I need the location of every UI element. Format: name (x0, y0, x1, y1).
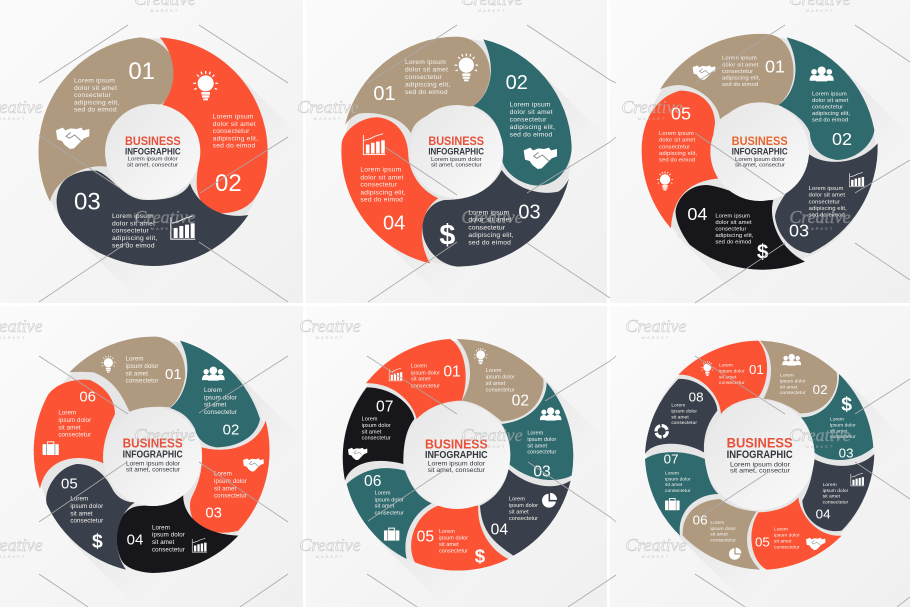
segment 03: Lorem (214, 471, 232, 478)
segment 05: $ (92, 531, 103, 552)
segment 03: dolor sit amet (468, 217, 512, 224)
segment 03: sed do eimod (112, 242, 155, 249)
segment 07 (645, 452, 718, 536)
Creative Market watermarks: Creative (625, 535, 687, 555)
segment 01: sit amet (719, 374, 737, 380)
segment 01 (366, 339, 466, 419)
segment 01: ipsum dolor (126, 363, 159, 370)
Creative Market watermarks: Creative (621, 97, 683, 117)
panel: six step cycle (34, 337, 302, 606)
Creative Market watermarks: MARKET (314, 116, 342, 121)
segment 05: consectetur (659, 144, 690, 150)
segment 04: sed do eimod (715, 240, 752, 246)
segment 01: Lorem (126, 356, 144, 363)
center label: sit amet, consectur (431, 163, 482, 169)
segment 03: Lorem ipsum (809, 186, 843, 192)
segment 01 (38, 37, 175, 202)
segment 04: sit amet (152, 539, 175, 546)
segment 02: Lorem (780, 373, 794, 379)
segment 04: 04 (383, 212, 405, 234)
segment 04: $ (757, 240, 769, 263)
segment 02: Lorem ipsum (510, 101, 551, 108)
center label: BUSINESS (732, 134, 788, 148)
segment 03: 03 (839, 445, 853, 460)
segment 05 (411, 506, 508, 571)
center label (705, 400, 815, 510)
segment 07: sit amet (362, 429, 382, 435)
segment 02: consectetur (780, 390, 806, 396)
segment 03: sed do eimod (809, 212, 845, 218)
segment 01: sit amet (126, 370, 148, 377)
segment 05: sit amet (774, 538, 792, 544)
segment 02: 02 (506, 72, 528, 94)
segment 01: consectetur (405, 74, 443, 81)
segment 02: 02 (512, 393, 529, 410)
segment 02: sed do eimod (812, 117, 848, 123)
center label: INFOGRAPHIC (727, 449, 793, 461)
Creative Market watermarks: Creative (299, 316, 361, 336)
segment 01: sed do eimod (74, 106, 117, 113)
center label: Lorem ipsum dolor (735, 157, 785, 163)
segment 03: consectetur (112, 228, 150, 235)
segment 04: adipiscing elit, (360, 189, 406, 196)
segment 02 (170, 341, 260, 447)
segment 01: Lorem (411, 364, 427, 370)
segment 02: ipsum dolor (780, 378, 806, 384)
segment 05: sit amet (439, 542, 459, 548)
segment 05: Lorem (439, 529, 455, 535)
Creative Market watermarks: Creative (297, 97, 359, 117)
segment 02: ipsum dolor (486, 375, 515, 381)
panel: three step cycle (38, 37, 301, 300)
segment 02: consectetur (510, 116, 547, 123)
segment 01: adipiscing elit, (74, 99, 120, 106)
Creative Market watermarks: MARKET (151, 8, 179, 13)
segment 01: consectetur (74, 92, 112, 99)
segment 04: consectetur (509, 516, 538, 522)
Creative Market watermarks: MARKET (316, 554, 344, 559)
segment 04: sit amet (509, 509, 529, 515)
segment 07: consectetur (665, 488, 691, 494)
segment 06: Lorem (710, 520, 724, 526)
segment 01: adipiscing elit, (405, 82, 451, 89)
segment 03: consectetur (809, 199, 840, 205)
segment 06: sit amet (375, 504, 395, 510)
segment 05: ipsum dolor (70, 503, 103, 510)
segment 04: sed do eimod (360, 197, 403, 204)
segment 05: sed do eimod (659, 157, 695, 163)
segment 02: sit amet (486, 381, 506, 387)
segment 02: consectetur (213, 128, 250, 135)
segment 01: sed do eimod (722, 82, 758, 88)
segment 01 (678, 341, 767, 414)
Creative Market watermarks: Creative (789, 207, 851, 227)
segment 02: sit amet (204, 402, 227, 409)
segment 03: sit amet (830, 428, 848, 434)
Creative Market watermarks: MARKET (478, 8, 506, 13)
segment 02: dolor sit amet (213, 121, 256, 128)
segment 07: sit amet (665, 482, 683, 488)
segment 07: ipsum dolor (362, 423, 391, 429)
center label: BUSINESS (123, 436, 183, 450)
segment 03 (801, 374, 873, 460)
segment 05: adipiscing elit, (659, 151, 697, 157)
segment 05: 05 (671, 103, 691, 123)
Creative Market watermarks: Creative (461, 207, 523, 227)
segment 01: dolor sit amet (74, 85, 117, 92)
segment 01 (69, 337, 185, 412)
segment 04: Lorem (152, 524, 170, 531)
segment 02: Lorem (204, 387, 222, 394)
segment 03: adipiscing elit, (112, 235, 158, 242)
Creative Market watermarks: MARKET (806, 444, 834, 449)
Creative Market watermarks: MARKET (806, 8, 834, 13)
segment 05: Lorem (774, 527, 788, 533)
segment 01: Lorem ipsum (405, 59, 446, 66)
segment 07: Lorem (665, 470, 679, 476)
segment 03: 03 (74, 188, 101, 215)
Creative Market watermarks: Creative (299, 535, 361, 555)
segment 03: $ (439, 219, 455, 251)
segment 06: ipsum dolor (375, 497, 404, 503)
segment 04 (676, 185, 805, 270)
segment 07 (343, 387, 414, 481)
segment 08 (645, 379, 717, 454)
segment 04: sit amet (823, 494, 841, 500)
panel: seven step cycle (343, 339, 606, 604)
segment 03: adipiscing elit, (809, 206, 847, 212)
Creative Market watermarks: Creative (134, 425, 196, 445)
segment 07: ipsum dolor (665, 476, 691, 482)
panel: eight step cycle (645, 341, 907, 603)
segment 06: 06 (79, 389, 96, 406)
segment 01: 01 (128, 58, 155, 85)
segment 01: 01 (373, 83, 396, 105)
segment 08: 08 (689, 389, 703, 404)
segment 06: Lorem (58, 410, 76, 417)
segment 03 (190, 421, 270, 533)
segment 05 (642, 91, 720, 228)
center label: INFOGRAPHIC (425, 450, 488, 461)
segment 04: 04 (816, 506, 831, 521)
Creative Market watermarks: MARKET (151, 226, 179, 231)
segment 03: ipsum dolor (527, 437, 557, 443)
segment 02: consectetur (812, 104, 843, 110)
segment 01: ipsum dolor (719, 368, 745, 374)
center label: sit amet, consectur (126, 467, 180, 473)
segment 06 (34, 380, 115, 489)
segment 03: Lorem ipsum (112, 213, 153, 220)
segment 02 (160, 37, 268, 213)
segment 03: consectetur (830, 434, 856, 440)
segment 04: Lorem ipsum (715, 213, 750, 219)
center label: sit amet, consectur (730, 468, 791, 475)
segment 04: ipsum dolor (152, 532, 185, 539)
segment 05: consectetur (439, 549, 468, 555)
segment 05: dolor sit amet (659, 138, 696, 144)
segment 02: 02 (223, 422, 239, 439)
segment 02: 02 (832, 129, 852, 149)
center label: sit amet, consectur (428, 467, 486, 474)
center label: INFOGRAPHIC (428, 146, 484, 156)
segment 04: Lorem (823, 482, 837, 488)
segment 02: adipiscing elit, (510, 124, 555, 131)
center label (410, 105, 503, 198)
segment 02: dolor sit amet (510, 109, 553, 116)
segment 03: ipsum dolor (214, 478, 247, 485)
segment 03: adipiscing elit, (468, 232, 514, 239)
segment 06: 06 (364, 473, 382, 490)
segment 03 (502, 382, 573, 480)
segment 08: Lorem (671, 402, 685, 408)
segment 02 (778, 37, 874, 160)
segment 06: Lorem (375, 491, 391, 497)
segment 05 (751, 497, 842, 570)
segment 04: consectetur (360, 182, 398, 189)
segment 03: Lorem ipsum (468, 209, 510, 216)
Creative Market watermarks: MARKET (638, 116, 666, 121)
segment 06: consectetur (375, 510, 404, 516)
segment 05: Lorem ipsum (659, 131, 694, 137)
segment 02: sed do eimod (213, 142, 255, 149)
segment 05 (46, 464, 135, 570)
center label: BUSINESS (727, 434, 793, 450)
segment 07: 07 (664, 452, 678, 467)
segment 02: ipsum dolor (204, 394, 237, 401)
segment 03: $ (841, 395, 852, 416)
segment 05: $ (475, 545, 486, 566)
segment 02: adipiscing elit, (812, 111, 850, 117)
center label (105, 104, 200, 199)
center label: Lorem ipsum dolor (128, 157, 178, 163)
segment 08: ipsum dolor (671, 408, 697, 414)
segment 03: consectetur (527, 450, 557, 456)
segment 04: 04 (491, 522, 508, 539)
segment 04: dolor sit amet (360, 174, 404, 181)
segment 03: sed do eimod (468, 239, 511, 246)
segment 01: Lorem (719, 363, 733, 369)
center label: Lorem ipsum dolor (730, 462, 791, 469)
segment 01: sit amet (411, 377, 431, 383)
segment 04 (117, 494, 238, 573)
segment 03 (57, 171, 248, 266)
segment 03: sit amet (527, 443, 547, 449)
segment 05: 05 (61, 475, 78, 492)
segment 06: consectetur (710, 538, 736, 544)
center label (103, 407, 202, 506)
segment 04: consectetur (152, 546, 185, 553)
segment 01: 01 (165, 366, 182, 383)
segment 02: Lorem ipsum (213, 114, 254, 121)
segment 07: consectetur (362, 436, 391, 442)
segment 01: dolor sit amet (722, 62, 759, 68)
segment 03: sit amet (214, 485, 237, 492)
segment 01: Lorem ipsum (722, 56, 757, 62)
segment 03: dolor sit amet (809, 193, 845, 199)
segment 04: consectetur (715, 227, 747, 233)
segment 02: Lorem ipsum (812, 91, 847, 97)
segment 02: 02 (813, 382, 827, 397)
segment 03: 03 (533, 463, 551, 480)
segment 05: sit amet (70, 510, 93, 517)
Creative Market watermarks: MARKET (478, 444, 506, 449)
segment 02: 02 (215, 170, 242, 197)
center label: BUSINESS (428, 134, 484, 148)
segment 04: consectetur (823, 500, 849, 506)
segment 05: 05 (755, 534, 770, 549)
segment 05: ipsum dolor (774, 533, 800, 539)
segment 04 (802, 454, 874, 531)
segment 01: adipiscing elit, (722, 76, 760, 82)
segment 04 (480, 469, 571, 556)
center label (710, 102, 809, 201)
segment 01: sed do eimod (405, 89, 448, 96)
segment 01: consectetur (126, 378, 159, 385)
segment 02: consectetur (486, 387, 515, 393)
center label: INFOGRAPHIC (732, 146, 788, 156)
segment 02: sed do eimod (510, 131, 552, 138)
center label: INFOGRAPHIC (123, 449, 183, 460)
segment 03 (422, 170, 569, 267)
segment 04: ipsum dolor (509, 503, 538, 509)
segment 06: ipsum dolor (710, 526, 736, 532)
segment 03: 03 (789, 221, 809, 241)
segment 05: consectetur (774, 544, 800, 550)
segment 03: dolor sit amet (112, 220, 155, 227)
center label: sit amet, consectur (127, 163, 178, 169)
segment 04: dolor sit amet (715, 220, 752, 226)
segment 01: Lorem ipsum (74, 78, 115, 85)
panel: four step cycle (341, 37, 606, 300)
Creative Market watermarks: MARKET (642, 554, 670, 559)
segment 02: consectetur (204, 409, 237, 416)
Creative Market watermarks: Creative (461, 425, 523, 445)
segment 03 (775, 143, 878, 253)
segment 03: 03 (518, 201, 541, 223)
segment 04: ipsum dolor (823, 488, 849, 494)
segment 04: Lorem (509, 496, 525, 502)
segment 01: 01 (443, 363, 461, 380)
Creative Market watermarks: MARKET (806, 226, 834, 231)
segment 01: consectetur (411, 383, 440, 389)
segment 05: consectetur (70, 518, 103, 525)
segment 08: consectetur (671, 420, 697, 426)
segment 04 (341, 117, 438, 263)
center label: Lorem ipsum dolor (431, 157, 482, 163)
segment 03: consectetur (468, 224, 506, 231)
segment 01: 01 (765, 57, 785, 77)
segment 02 (760, 341, 837, 413)
segment 01: ipsum dolor (411, 370, 440, 376)
segment 02: adipiscing elit, (213, 135, 258, 142)
segment 06: sit amet (710, 532, 728, 538)
segment 07: 07 (376, 399, 393, 416)
center label (404, 402, 510, 509)
segment 02 (473, 39, 572, 186)
Creative Market watermarks: MARKET (478, 226, 506, 231)
segment 01: consectetur (722, 69, 753, 75)
segment 03: Lorem (527, 430, 544, 436)
segment 03: Lorem (830, 417, 844, 423)
center label: BUSINESS (125, 134, 181, 148)
segment 05: Lorem (70, 496, 88, 503)
Creative Market watermarks: MARKET (642, 335, 670, 340)
segment 06: ipsum dolor (58, 417, 91, 424)
segment 03: 03 (205, 504, 222, 521)
segment 02 (457, 339, 544, 421)
segment 04: Lorem ipsum (360, 167, 402, 174)
center label: Lorem ipsum dolor (428, 461, 486, 468)
segment 01: consectetur (719, 380, 745, 386)
segment 07: Lorem (362, 416, 378, 422)
segment 01 (660, 34, 794, 119)
Creative Market watermarks: Creative (789, 425, 851, 445)
segment 01: 01 (749, 362, 764, 377)
segment 05: ipsum dolor (439, 536, 468, 542)
Creative Market watermarks: MARKET (151, 444, 179, 449)
center label: BUSINESS (425, 436, 488, 451)
segment 05: 05 (417, 529, 434, 546)
segment 02: Lorem (486, 368, 502, 374)
panel: five step cycle (642, 34, 910, 302)
Creative Market watermarks: Creative (134, 207, 196, 227)
segment 03: consectetur (214, 493, 247, 500)
center label: INFOGRAPHIC (125, 146, 181, 156)
segment 04: 04 (687, 204, 707, 224)
segment 06: sit amet (58, 424, 81, 431)
segment 06 (683, 499, 760, 570)
center label: Lorem ipsum dolor (126, 461, 180, 467)
segment 02: dolor sit amet (812, 98, 849, 104)
segment 01: dolor sit amet (405, 67, 448, 74)
segment 06 (347, 468, 432, 559)
segment 01 (345, 37, 490, 133)
segment 04: 04 (127, 532, 143, 549)
Creative Market watermarks: MARKET (316, 335, 344, 340)
Creative Market watermarks: Creative (625, 316, 687, 336)
segment 04: adipiscing elit, (715, 233, 754, 239)
segment 08: sit amet (671, 414, 689, 420)
segment 02: sit amet (780, 384, 798, 390)
center label: sit amet, consectur (735, 163, 785, 169)
segment 06: 06 (693, 513, 707, 528)
segment 03: ipsum dolor (830, 423, 856, 429)
segment 06: consectetur (58, 432, 91, 439)
